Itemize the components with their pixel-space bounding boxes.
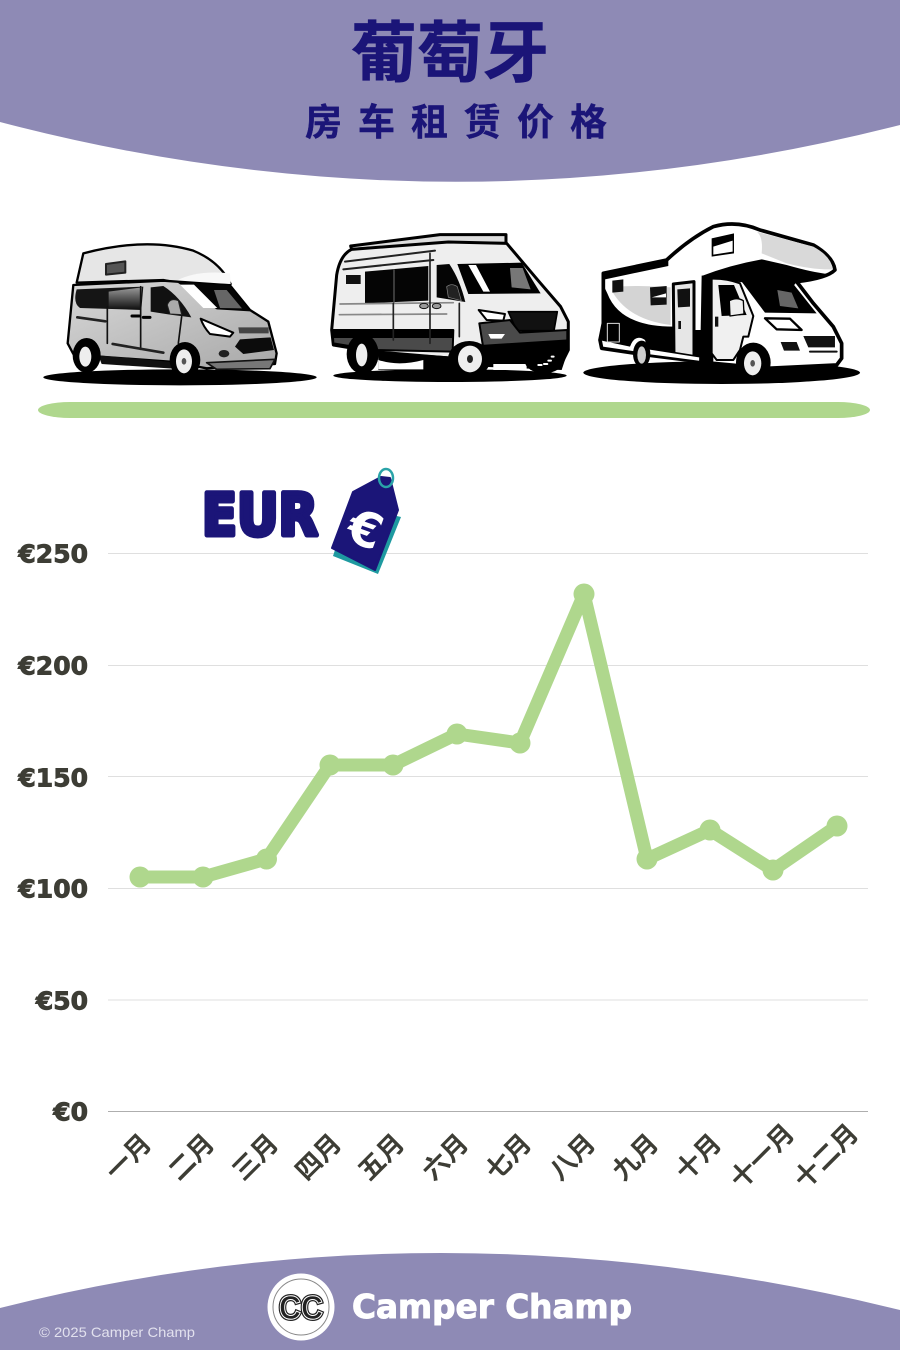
currency label EUR: EUR bbox=[202, 481, 318, 549]
x axis labels: 十二月 bbox=[788, 1118, 864, 1194]
x axis labels: 九月 bbox=[606, 1128, 664, 1186]
grid lines bbox=[108, 554, 868, 1112]
y axis labels: €100 bbox=[17, 874, 88, 904]
icon: panel van bbox=[332, 235, 568, 382]
logo: CC bbox=[279, 1289, 323, 1326]
title: 葡萄牙 bbox=[351, 16, 549, 90]
data line bbox=[130, 584, 848, 888]
logo bbox=[268, 1274, 334, 1340]
x axis labels: 五月 bbox=[352, 1128, 410, 1186]
icon: hi-top campervan bbox=[43, 244, 317, 385]
y axis labels: €50 bbox=[35, 986, 88, 1016]
footer banner bbox=[0, 1253, 900, 1350]
y axis labels: €150 bbox=[17, 764, 88, 792]
green divider bar bbox=[38, 402, 870, 418]
icon: euro price tag: € bbox=[339, 498, 390, 562]
icon: motorhome bbox=[583, 224, 860, 384]
header banner bbox=[0, 0, 900, 182]
x axis labels: 八月 bbox=[543, 1128, 601, 1186]
x axis labels: 六月 bbox=[416, 1128, 474, 1186]
y axis labels: €200 bbox=[17, 652, 88, 680]
x axis labels: 三月 bbox=[226, 1128, 284, 1186]
x axis labels: 二月 bbox=[162, 1128, 220, 1186]
subtitle: 房车租赁价格 bbox=[305, 102, 623, 143]
x axis labels: 十一月 bbox=[724, 1118, 800, 1194]
line chart bbox=[17, 540, 868, 1194]
copyright: © 2025 Camper Champ bbox=[39, 1324, 195, 1340]
brand name: Camper Champ bbox=[352, 1287, 632, 1326]
icon: euro price tag bbox=[332, 469, 401, 574]
x axis labels: 十月 bbox=[669, 1128, 727, 1186]
y axis labels: €0 bbox=[52, 1098, 88, 1126]
x axis labels: 七月 bbox=[479, 1128, 537, 1186]
x axis labels bbox=[99, 1118, 864, 1194]
y axis labels: €250 bbox=[17, 540, 88, 568]
x axis labels: 四月 bbox=[289, 1128, 347, 1186]
x axis labels: 一月 bbox=[99, 1128, 157, 1186]
logo: CC bbox=[279, 1289, 323, 1326]
y axis labels bbox=[17, 540, 88, 1126]
